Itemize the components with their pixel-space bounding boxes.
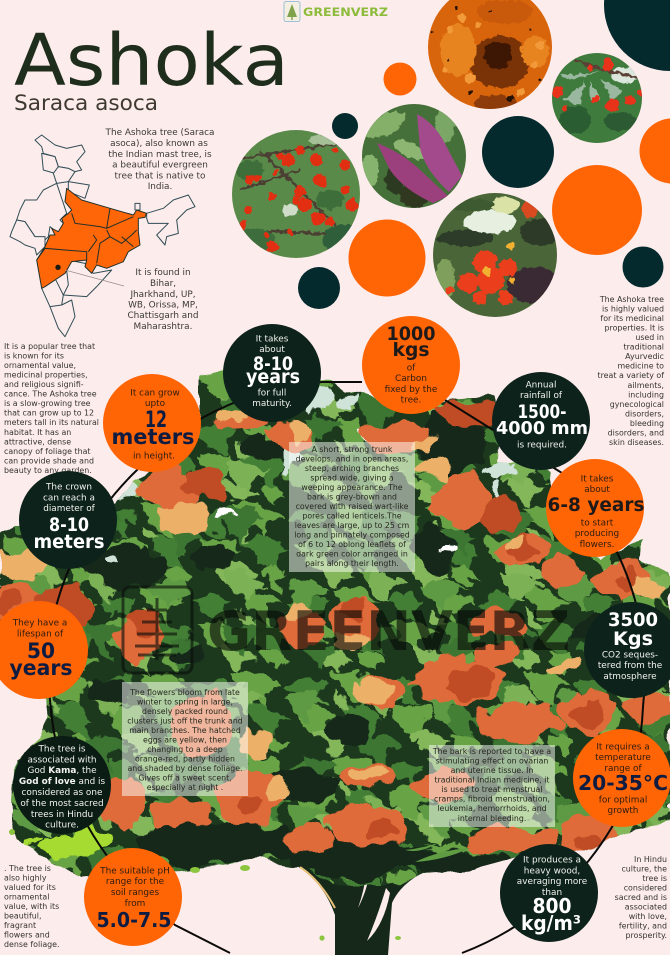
text: popular tree description: attractive, dense [4, 437, 71, 446]
fact: carbon fixed [362, 316, 460, 414]
text: medicinal uses: properties. It is [604, 324, 664, 333]
text box: trunk and leaves: steep, arching branches [305, 464, 399, 473]
text: popular tree description: habitat. It has an [4, 428, 71, 437]
tree: dark shadow areas [85, 413, 606, 881]
text: ornamental value: . The tree is [4, 864, 51, 873]
photo: orange flower cluster [426, 0, 554, 111]
text: medicinal uses: is highly valued [602, 304, 664, 314]
text: medicinal uses: medicine to [617, 362, 664, 371]
fact: height: in height. [133, 452, 175, 462]
fact: years to maturity: about [259, 345, 285, 355]
photo: red ashoka flower [432, 192, 563, 319]
text: popular tree description: is a slow-growing tree [4, 399, 91, 408]
fact: CO2 sequestered: 3500 [608, 609, 658, 631]
fact: Hindu association: considered as one [22, 788, 102, 798]
fact: wood density [500, 844, 598, 942]
watermark: logo square [123, 587, 192, 673]
fact: years to maturity: It takes [256, 334, 289, 344]
fact: CO2 sequestered: CO2 seques- [602, 650, 658, 660]
photo: purple leaves [360, 103, 468, 209]
text: popular tree description: medicinal properties, [4, 371, 88, 380]
fact: wood density: than [542, 888, 562, 898]
text: introduction: The Ashoka tree (Saraca [105, 128, 214, 138]
photo: leaves and red blossoms [550, 52, 645, 145]
text: introduction [105, 128, 214, 192]
fact: carbon fixed: of [407, 364, 416, 374]
fact: years to maturity: years [246, 366, 300, 388]
fact: temperature range: temperature [595, 753, 651, 763]
watermark: Greenverz [123, 587, 570, 673]
fact: annual rainfall: 1500- [518, 401, 566, 423]
fact: lifespan: years [10, 656, 72, 680]
text box: flowers: especially at night . [147, 783, 223, 792]
text: introduction: the Indian mast tree, is [108, 150, 212, 160]
fact: carbon fixed: 1000 [386, 323, 436, 345]
text box: flowers: clusters just off the trunk and [127, 716, 243, 726]
text box: bark [429, 745, 555, 827]
text: Hindu culture: with love, [629, 912, 667, 921]
fact: Hindu association: The tree is [37, 744, 86, 754]
fact: temperature range: for optimal [599, 796, 647, 806]
fact: soil pH: 5.0-7.5 [96, 908, 172, 932]
text box: bark: The bark is reported to have a [432, 747, 551, 756]
text: where it is found: Chattisgarh and [127, 311, 199, 321]
fact: lifespan: They have a [12, 618, 67, 628]
text: medicinal uses: traditional [623, 343, 664, 352]
fact: annual rainfall: is required. [517, 440, 567, 450]
text: introduction: India. [148, 182, 172, 192]
fact: height: meters [112, 425, 194, 449]
fact: years to flowering: about [584, 485, 610, 495]
text box: bark: traditional Indian medicine, it [435, 776, 549, 784]
text box: flowers: orange-red, partly hidden [135, 754, 235, 764]
illustration: ashoka tree [0, 360, 670, 955]
fact: annual rainfall: Annual [526, 380, 556, 390]
fact: soil pH [84, 848, 182, 946]
text box: flowers: Gives off a sweet scent, [138, 774, 232, 782]
text: introduction: tree that is native to [115, 172, 205, 182]
text box: trunk and leaves: spread wide, giving a [310, 474, 394, 482]
fact: soil pH: The suitable pH [99, 866, 170, 876]
text: Hindu culture: In Hindu [634, 855, 667, 864]
text: popular tree description: meters tall in its natural [4, 418, 99, 427]
tree: orange blossoms [0, 400, 670, 868]
tree: bright leaves and sky gaps [20, 384, 516, 857]
fact: years to maturity: for full [258, 388, 286, 398]
fact: Hindu association [13, 736, 111, 834]
text: popular tree description: beauty to any garden. [4, 466, 92, 475]
text box: flowers [122, 682, 248, 796]
text: Hindu culture: culture, the [621, 864, 667, 874]
fact: years to flowering: flowers. [580, 540, 614, 550]
text box: bark: and uterine tissue. In [451, 766, 533, 775]
text: ornamental value: value, with its [4, 902, 59, 911]
text: medicinal uses: for its medicinal [600, 314, 664, 323]
fact: carbon fixed: tree. [401, 396, 421, 406]
fact: years to flowering: to start [581, 518, 614, 528]
text: popular tree description: and religious signifi- [4, 380, 84, 389]
decorative circles [298, 0, 670, 309]
fact: lifespan: 50 [27, 639, 55, 663]
text: medicinal uses: Ayurvedic [625, 352, 664, 361]
fact: wood density: 800 [532, 894, 572, 918]
text: ornamental value: flowers and [4, 930, 50, 940]
text: popular tree description [4, 342, 99, 475]
text: Hindu culture: prosperity. [626, 931, 667, 940]
text box: trunk and leaves: develops, and in open areas, [296, 454, 408, 464]
fact: CO2 sequestered: atmosphere [603, 672, 657, 682]
fact: height [103, 374, 201, 472]
text box: trunk and leaves: of 6 to 12 oblong leaflets of [298, 540, 406, 549]
subtitle: Saraca asoca [14, 91, 158, 115]
text: popular tree description: cance. The Ashoka tree [4, 390, 97, 399]
text box: trunk and leaves: long and pinnately composed [294, 530, 410, 540]
text box: trunk and leaves: bark is grey-brown and [307, 492, 397, 502]
fact: Hindu association: trees in Hindu [31, 810, 93, 820]
map: location dot [55, 265, 61, 270]
text: where it is found [127, 268, 199, 332]
text box: trunk and leaves: weeping appearance. The [301, 483, 403, 492]
tree: canopy foliage [0, 370, 670, 886]
fact: years to maturity: 8-10 [253, 353, 293, 375]
text: where it is found: Bihar, [150, 279, 176, 289]
fact: annual rainfall [492, 372, 590, 470]
text box: flowers: densely packed round [142, 707, 228, 716]
text: ornamental value: beautiful, [4, 912, 41, 920]
fact: crown diameter: can reach a [43, 494, 95, 504]
fact: carbon fixed: kgs [392, 339, 430, 361]
text: ornamental value: also highly [4, 874, 47, 882]
fact: CO2 sequestered: tered from the [598, 661, 662, 671]
text: popular tree description: can provide shade and [4, 456, 94, 465]
text: Hindu culture: considered [624, 884, 667, 892]
text: popular tree description: canopy of foliage that [4, 447, 91, 456]
fact: Hindu association: God of love and is [19, 777, 106, 787]
fact: lifespan [0, 601, 88, 699]
fact: temperature range: range of [604, 764, 642, 774]
text: medicinal uses: disorders, and [608, 428, 664, 437]
fact: temperature range: growth [608, 806, 638, 816]
text: where it is found: WB, Orissa, MP, [128, 300, 198, 310]
text box: bark: stimulating effect on ovarian [436, 756, 548, 766]
text: medicinal uses: gynecological [610, 400, 664, 409]
map: leader line [65, 270, 124, 286]
text: medicinal uses: including [628, 390, 664, 399]
fact: years to maturity: maturity. [252, 399, 292, 409]
text: introduction: asoca), also known as [110, 139, 208, 149]
fact: crown diameter [19, 471, 117, 569]
fact: lifespan: lifespan of [17, 630, 64, 640]
fact: Hindu association: of the most sacred [20, 799, 104, 809]
fact: soil pH: from [125, 899, 145, 909]
logo: Greenverz header: GREENVERZ [303, 5, 388, 19]
fact: wood density: averaging more [517, 877, 587, 887]
fact: height: It can grow [130, 388, 180, 398]
text: medicinal uses: ailments, [628, 381, 664, 390]
fact: wood density: heavy wood, [524, 866, 580, 876]
fact: wood density: kg/m³ [521, 911, 581, 935]
fact: crown diameter: diameter of [43, 504, 96, 514]
fact: Hindu association: God Kama, the [27, 766, 97, 776]
ring connecting the facts [49, 382, 645, 953]
text: Hindu culture: associated [625, 902, 667, 912]
fact: carbon fixed: Carbon [395, 374, 427, 384]
text: medicinal uses: treat a variety of [598, 371, 664, 380]
text box: flowers: eggs are yellow, then [143, 736, 227, 744]
tree: trunk [280, 820, 540, 955]
fact: years to flowering [546, 459, 644, 557]
text box: trunk and leaves: covered with raised wart-like [296, 502, 409, 511]
text box: flowers: winter to spring in large, [137, 698, 233, 706]
text: ornamental value: fragrant [4, 921, 36, 930]
text: Hindu culture: sacred and is [615, 893, 667, 902]
fact: temperature range: It requires a [596, 742, 650, 752]
text: medicinal uses: used in [635, 333, 664, 342]
fact: CO2 sequestered: Kgs [613, 628, 653, 650]
text box: bark: is used to treat menstrual [442, 785, 542, 794]
text: introduction: a beautiful evergreen [112, 160, 208, 170]
fact: years to maturity [223, 324, 321, 422]
text: medicinal uses [598, 295, 664, 447]
text: ornamental value: dense foliage. [4, 940, 60, 949]
text box: trunk and leaves: dark green color arranged in [296, 550, 408, 558]
text: where it is found: Jharkhand, UP, [129, 290, 196, 300]
fact: height: upto [145, 399, 165, 409]
watermark: wordmark: GREENVERZ [207, 600, 570, 663]
fact: height: 12 [145, 408, 167, 433]
logo: Greenverz header [284, 2, 388, 22]
fact: years to flowering: producing [575, 529, 619, 539]
fact: annual rainfall: 4000 mm [496, 418, 588, 439]
text box: trunk and leaves: leaves are large, up to 25 cm [295, 521, 409, 530]
text: where it is found: Maharashtra. [134, 322, 192, 332]
photo: flowering tree canopy [230, 130, 367, 258]
text: popular tree description: that can grow up to 12 [4, 409, 94, 418]
map: highlighted states [37, 188, 147, 288]
text: medicinal uses: skin diseases. [609, 438, 664, 447]
text: medicinal uses: bleeding [630, 419, 664, 428]
fact: temperature range [573, 729, 670, 827]
text: popular tree description: is known for its [4, 352, 64, 360]
text: ornamental value [4, 864, 60, 949]
text: popular tree description: It is a popular tree that [4, 342, 95, 351]
map: white states [10, 135, 195, 337]
text: popular tree description: ornamental value, [4, 361, 76, 370]
text box: trunk and leaves: A short, strong trunk [312, 445, 393, 454]
map of India [10, 135, 195, 337]
text box: trunk and leaves [289, 442, 415, 572]
fact: soil pH: range for the [106, 877, 164, 887]
fact: temperature range: 20-35°C [578, 771, 668, 795]
text box: bark: cramps, fibroid menstruation, [434, 794, 550, 804]
text box: bark: internal bleeding. [458, 814, 526, 823]
text: medicinal uses: disorders, [625, 409, 664, 418]
fact: crown diameter: The crown [45, 482, 92, 492]
text: where it is found: It is found in [135, 268, 191, 278]
text box: bark: leukemia, hemorrhoids, and [437, 804, 547, 813]
text: ornamental value: ornamental [4, 892, 49, 902]
fact: years to flowering: 6-8 years [548, 494, 644, 516]
tree: branch highlights [405, 842, 470, 862]
text box: trunk and leaves: pairs along their length. [305, 559, 399, 568]
title: Ashoka [14, 19, 289, 102]
fact: carbon fixed: fixed by the [385, 385, 437, 395]
text box: flowers: and shaded by dense foliage. [127, 764, 243, 773]
text box: flowers: The flowers bloom from late [129, 688, 240, 697]
fact: soil pH: soil ranges [111, 888, 159, 898]
text: Hindu culture: fertility, and [619, 922, 667, 930]
fact: Hindu association: associated with [27, 756, 97, 766]
text: Hindu culture: tree is [642, 874, 667, 883]
text box: trunk and leaves: pores called lenticels.The [302, 512, 402, 520]
fact: crown diameter: 8-10 [49, 514, 89, 536]
fact: years to flowering: It takes [581, 474, 614, 484]
text box: flowers: main branches. The hatched [129, 726, 241, 735]
fact: annual rainfall: rainfall of [520, 391, 563, 401]
text: ornamental value: valued for its [4, 883, 56, 892]
text: Hindu culture [615, 855, 667, 940]
fact: CO2 sequestered [584, 602, 670, 698]
fact: crown diameter: meters [34, 531, 104, 553]
fact: wood density: It produces a [523, 856, 581, 866]
fact: Hindu association: culture. [45, 820, 79, 830]
tree: stray leaves [9, 829, 401, 941]
text: medicinal uses: The Ashoka tree [599, 295, 664, 304]
text box: flowers: changing to a deep [147, 745, 223, 754]
